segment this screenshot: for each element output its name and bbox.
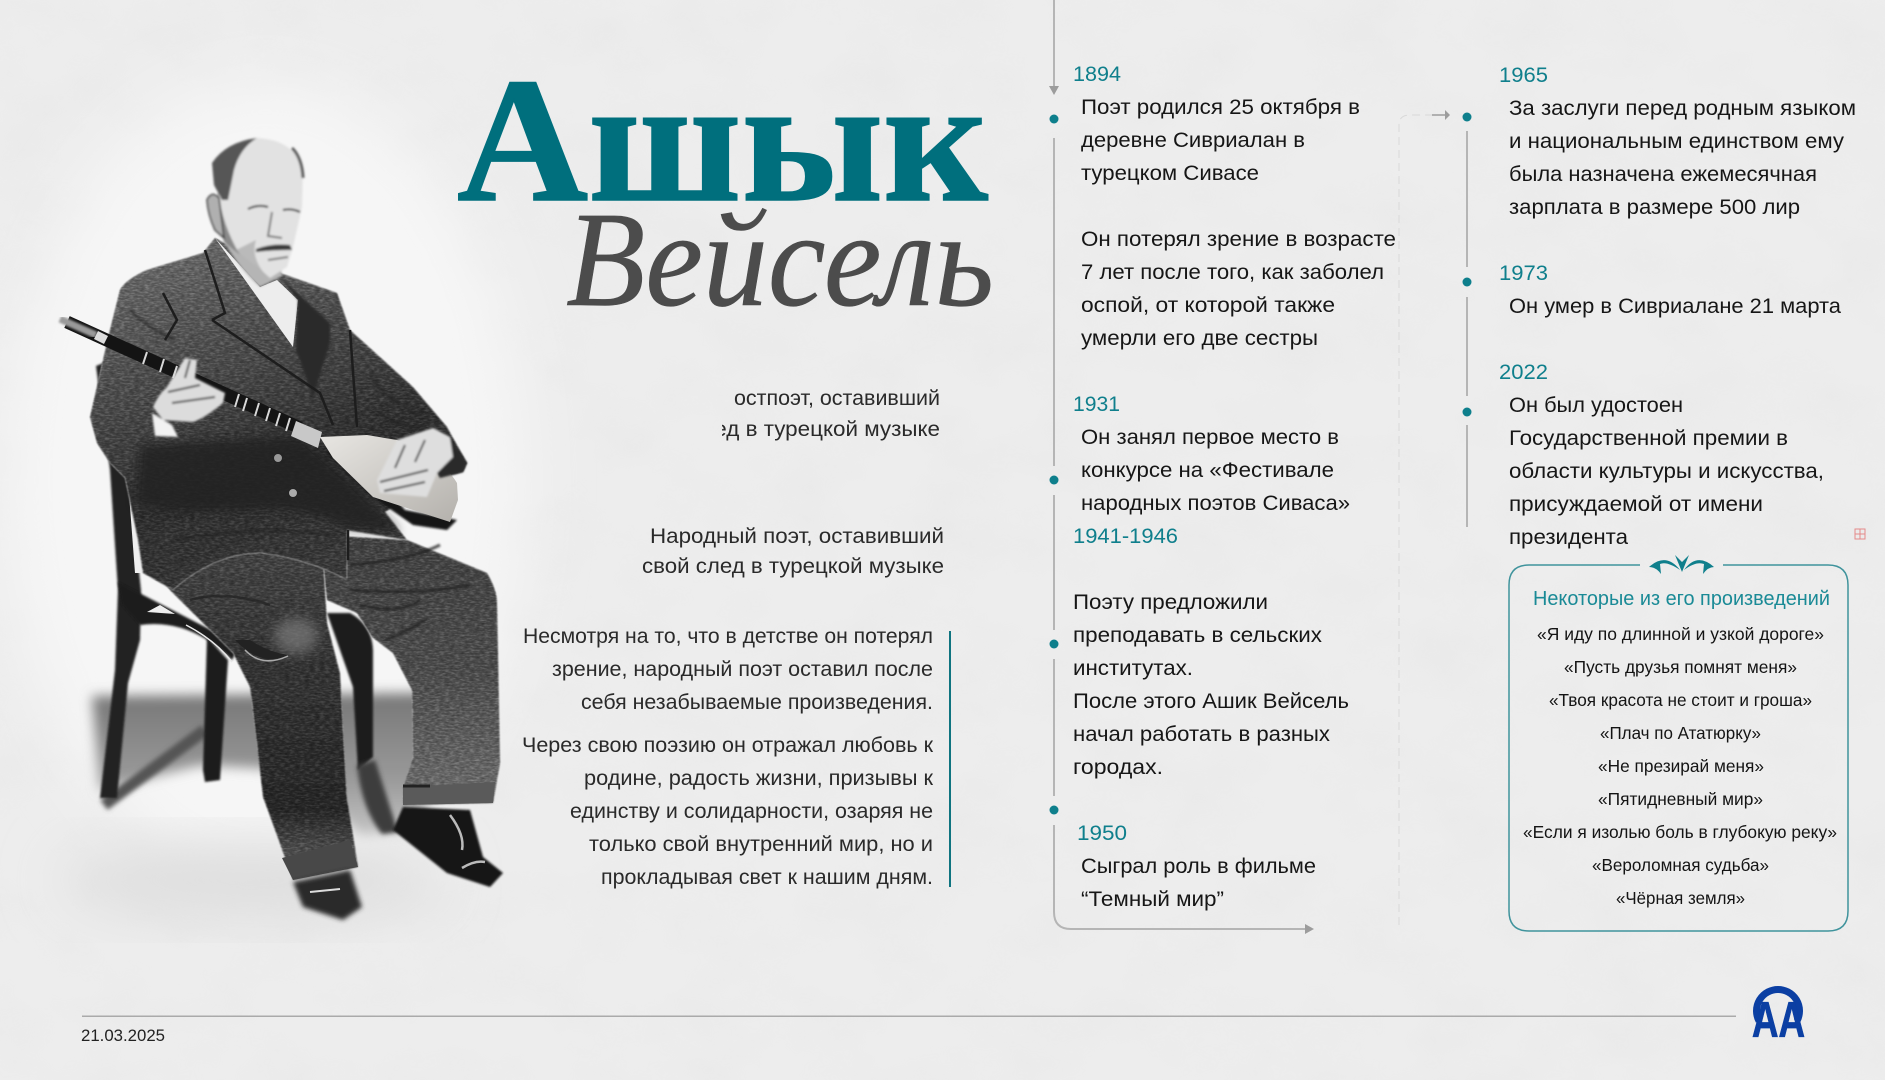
list of works: «Твоя красота не стоит и гроша» [1549,690,1812,710]
entry 1965 [1499,64,1856,219]
entry 2022 [1499,361,1824,549]
footer rule [82,1016,1736,1017]
intro text block [522,625,934,889]
list of works: «Чёрная земля» [1616,888,1745,908]
entry 1894 [1073,63,1396,350]
entry 1931: Он занял первое место в [1081,426,1339,449]
list of works: «Я иду по длинной и узкой дороге» [1537,624,1824,644]
list of works: «Плач по Ататюрку» [1600,723,1761,743]
intro text block: единству и солидарности, озаряя не [570,800,933,823]
entry 1950: “Темный мир” [1081,888,1224,911]
saz [60,319,458,530]
list of works: «Если я изолью боль в глубокую реку» [1523,822,1837,842]
timeline line and arrows, column 1 [1049,0,1314,934]
entry 1941-1946: городах. [1073,756,1163,779]
entry 1931: 1931 [1073,393,1120,416]
entry 2022: области культуры и искусства, [1509,460,1824,483]
intro text block: себя незабываемые произведения. [581,691,933,714]
entry 1931: конкурсе на «Фестивале [1081,459,1334,482]
entry 1894: Поэт родился 25 октября в [1081,96,1360,119]
entry 1941-1946: 1941-1946 [1073,525,1178,548]
panel heading: Некоторые из его произведений [1533,588,1830,610]
chair [96,362,398,834]
entry 1950: Сыграл роль в фильме [1081,855,1316,878]
entry 1894: деревне Сивриалан в [1081,129,1305,152]
entry 2022: 2022 [1499,361,1548,384]
list of works: «Вероломная судьба» [1592,855,1769,875]
icon: ornament [1649,555,1714,574]
entry 1941-1946: После этого Ашик Вейсель [1073,690,1349,713]
timeline dots [1050,112,1472,814]
entry 1950: 1950 [1077,822,1127,845]
entry 1941-1946: преподавать в сельских [1073,624,1323,647]
entry 1941-1946: начал работать в разных [1073,723,1331,746]
entry 2022: Государственной премии в [1509,427,1788,450]
head [207,138,303,287]
small overflow marker [1855,529,1865,539]
entry 1973: 1973 [1499,262,1548,285]
list of works: «Не презирай меня» [1598,756,1764,776]
entry 2022: Он был удостоен [1509,394,1683,417]
entry 1941-1946: Поэту предложили [1073,591,1268,614]
ghost subtitle fragment: остпоэт, оставивший [734,387,940,410]
entry 1894: турецком Сивасе [1081,162,1259,185]
hands [152,358,467,497]
entry 1965: зарплата в размере 500 лир [1509,196,1800,219]
entry 1894: умерли его две сестры [1081,327,1318,350]
entry 1965: 1965 [1499,64,1548,87]
ghost subtitle fragment: след в турецкой музыке [690,418,940,441]
entry 2022: президента [1509,526,1628,549]
subtitle: Народный поэт, оставивший [650,525,944,548]
trousers, left leg [150,530,358,880]
title line: Ашык: Ашык [457,41,988,239]
shoes [393,807,503,887]
panel: some of his works [1509,555,1848,931]
entry 1931: народных поэтов Сиваса» [1081,492,1350,515]
entry 1894: Он потерял зрение в возрасте [1081,228,1396,251]
entry 1965: и национальным единством ему [1509,130,1845,153]
trousers, right leg [320,535,500,805]
title [457,41,994,335]
accent bar [949,631,951,887]
portrait: poet with saz on chair [5,80,525,920]
dashed connector [1399,110,1450,925]
intro text block: Несмотря на то, что в детстве он потерял [523,625,933,648]
entry 1931 [1073,393,1350,515]
subtitle [642,525,944,578]
entry 1894: 1894 [1073,63,1121,86]
timeline line, column 2 [1466,131,1468,527]
timeline column 2 text [1499,64,1856,549]
ghost subtitle fragment [722,389,939,440]
jacket [90,238,467,590]
list of works [1523,624,1837,908]
intro text block: Через свою поэзию он отражал любовь к [522,734,934,757]
list of works: «Пятидневный мир» [1598,789,1763,809]
intro text block: родине, радость жизни, призывы к [584,767,934,790]
timeline column 1 text [1073,63,1396,911]
entry 1941-1946 [1073,525,1349,779]
intro text block: зрение, народный поэт оставил после [552,658,933,681]
list of works: «Пусть друзья помнят меня» [1564,657,1797,677]
intro text block: прокладывая свет к нашим дням. [601,866,933,889]
entry 1894: 7 лет после того, как заболел [1081,261,1384,284]
entry 1965: была назначена ежемесячная [1509,163,1817,186]
intro text block: только свой внутренний мир, но и [589,833,933,856]
entry 1941-1946: институтах. [1073,657,1193,680]
icon: AA logo: AA [1752,992,1805,1048]
entry 1894: оспой, от которой также [1081,294,1335,317]
date: 21.03.2025 [81,1027,165,1045]
entry 1950 [1077,822,1316,911]
subtitle: свой след в турецкой музыке [642,555,944,578]
entry 1965: За заслуги перед родным языком [1509,97,1856,120]
entry 2022: присуждаемой от имени [1509,493,1763,516]
title line: Вейсель: Вейсель [566,185,994,335]
entry 1973 [1499,262,1841,318]
entry 1973: Он умер в Сивриалане 21 марта [1509,295,1841,318]
